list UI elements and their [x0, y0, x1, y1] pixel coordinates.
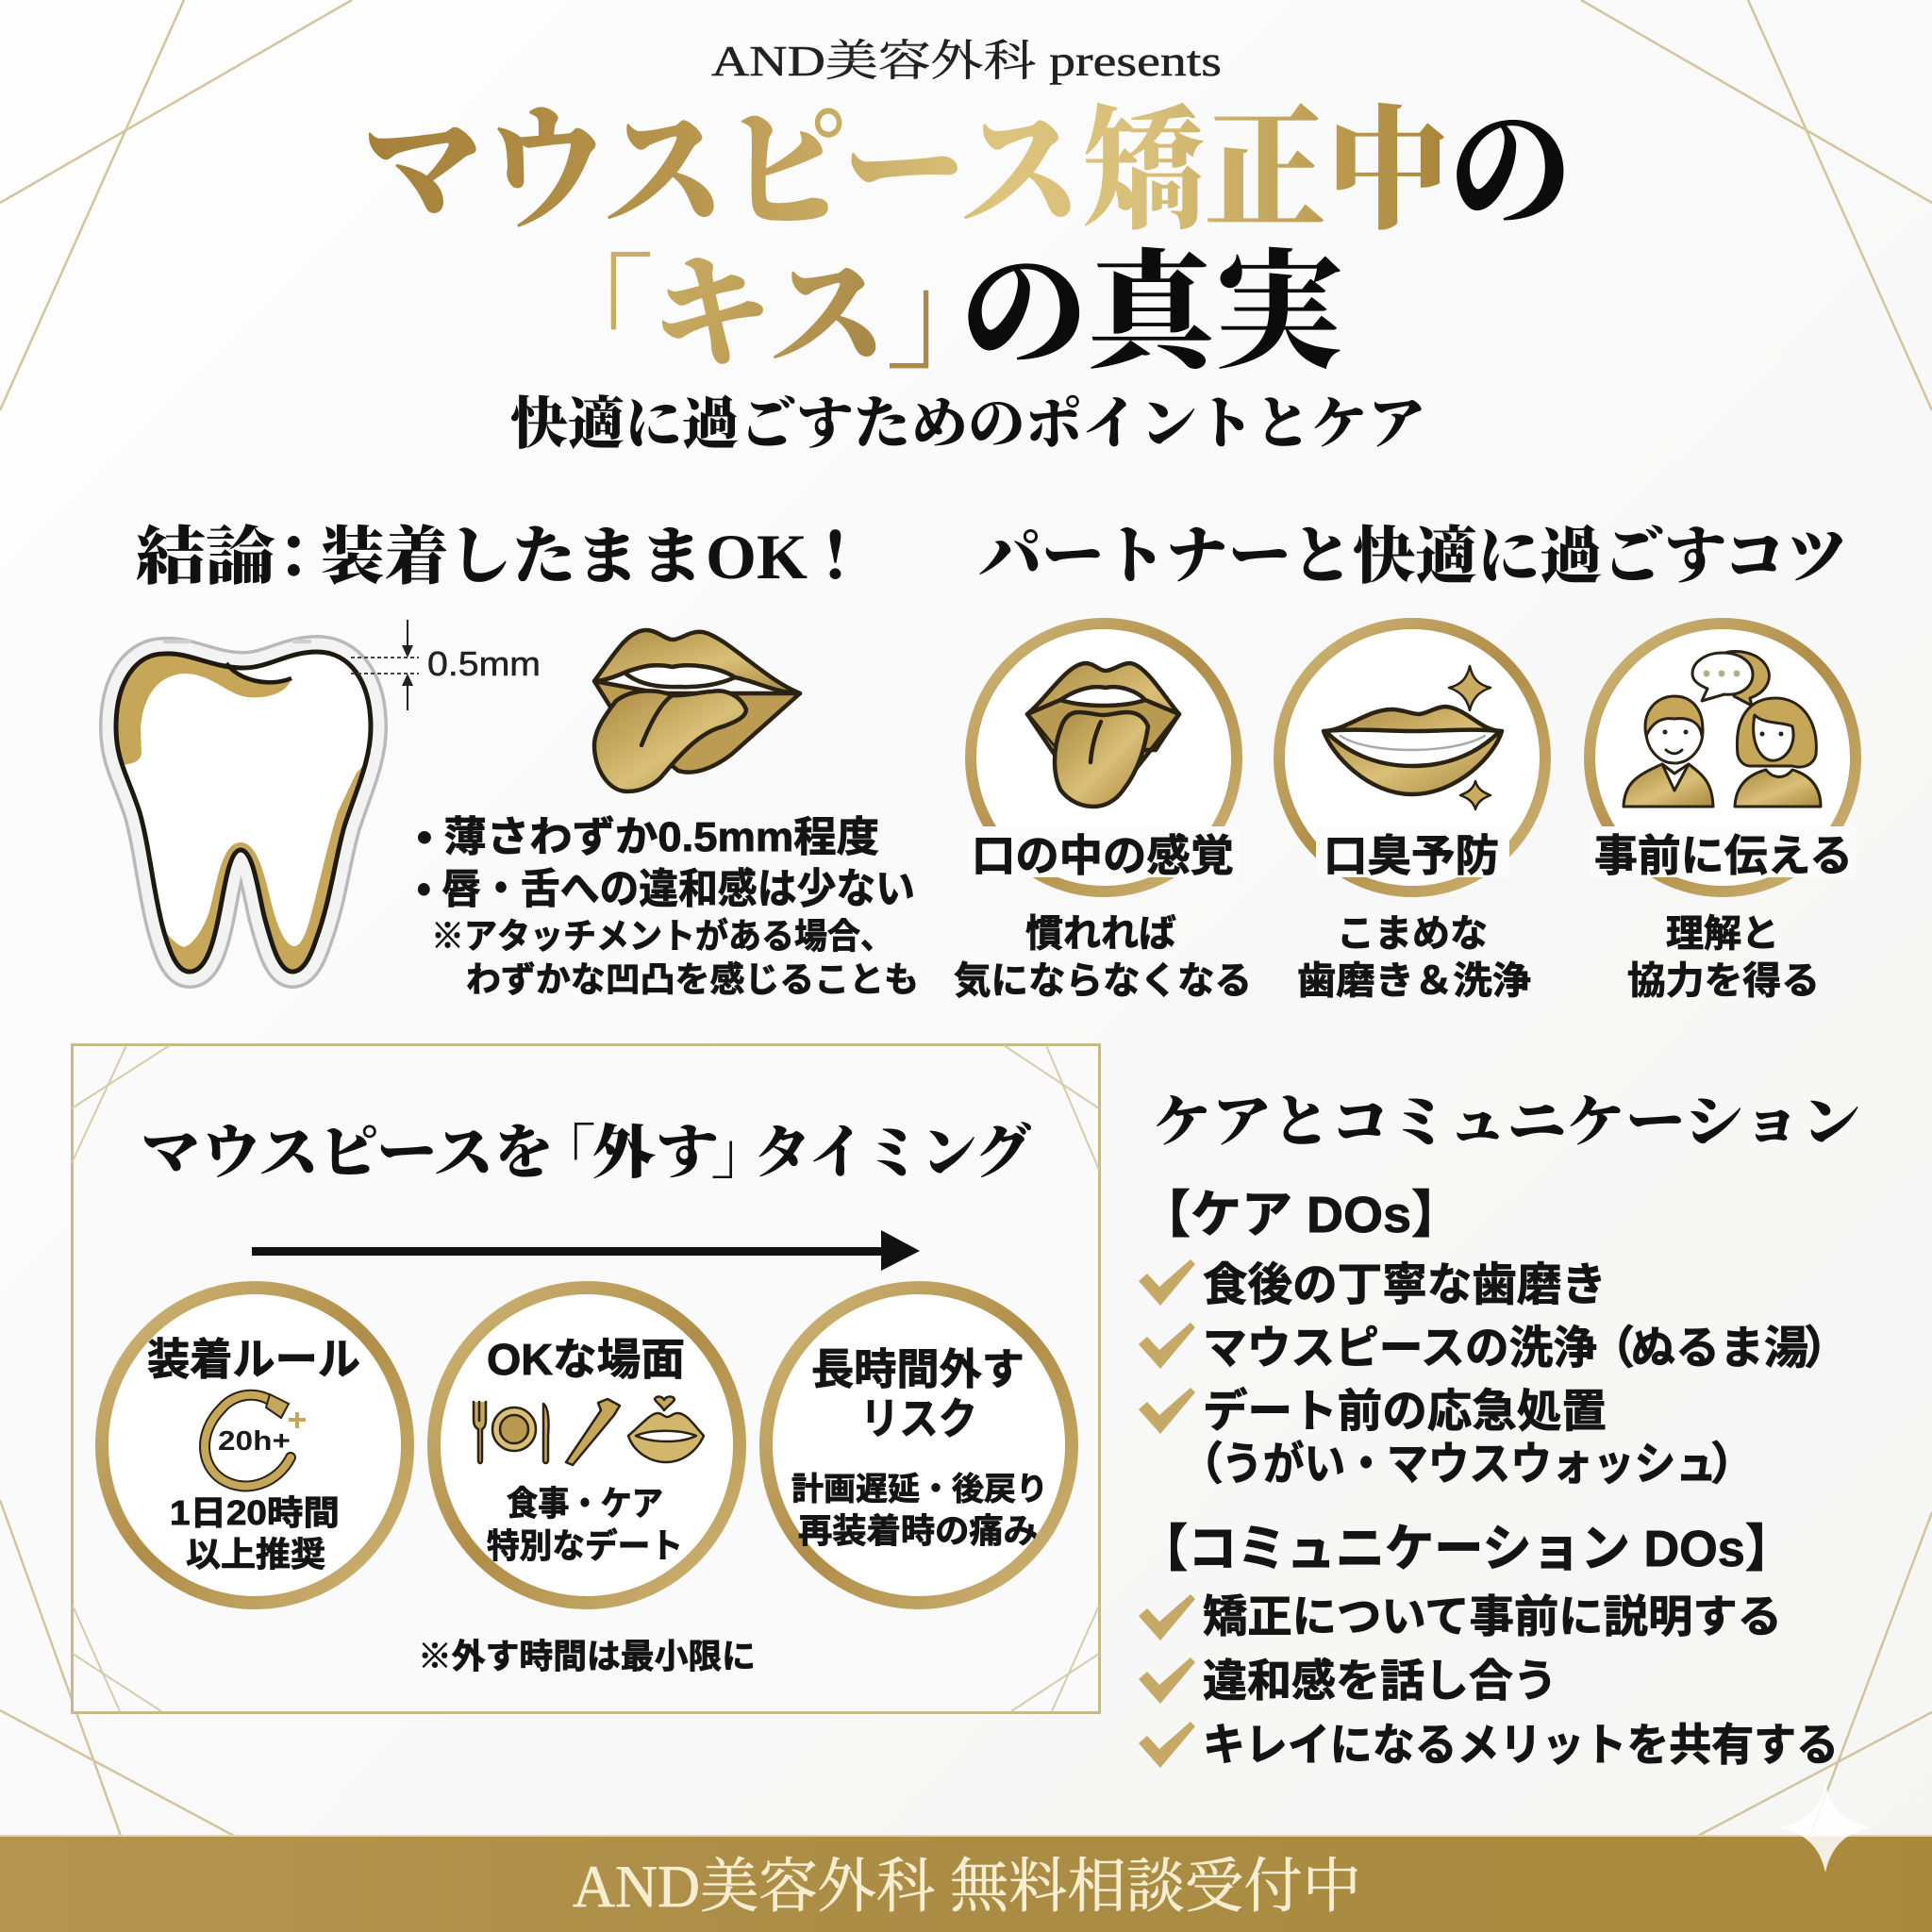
icon: 20h+ cycle — [205, 1394, 306, 1486]
circle: OK situations — [434, 1288, 740, 1603]
label: tell in advance: 事前に伝える — [1594, 831, 1853, 880]
panel: removal timing — [72, 1045, 1100, 1713]
text: thinness notes: わずかな凹凸を感じることも — [466, 960, 919, 999]
icon: mouth and tongue — [1027, 663, 1179, 807]
list items: care — [1178, 1260, 1849, 1490]
arrow — [252, 1230, 920, 1271]
circle: wearing rule — [102, 1288, 408, 1603]
text: breath care detail: 歯磨き＆洗浄 — [1297, 960, 1531, 1002]
header presenter line: AND美容外科 presents — [711, 37, 1222, 85]
heading: removal timing: 「 — [537, 1122, 595, 1186]
icon: lips with tongue — [594, 630, 800, 791]
list items: communication — [1203, 1591, 1839, 1770]
heading: conclusion: 結論 — [136, 523, 275, 592]
heading: partner tips: パートナーと快適に過ごすコツ — [979, 523, 1848, 591]
icon: 20h+ cycle: 20h+ — [218, 1426, 291, 1457]
text: OK situations detail: 特別なデート — [487, 1526, 683, 1565]
callout: thickness 0.5mm — [351, 620, 541, 710]
footer band — [0, 1835, 1932, 1932]
text: thinness notes: • 薄さわずか0.5mm程度 — [417, 814, 879, 860]
footer text: AND美容外科 無料相談受付中 — [573, 1854, 1361, 1920]
list items: care: ） — [1710, 1440, 1756, 1490]
heading: conclusion: OK — [706, 521, 808, 592]
text: thinness notes: • 唇・舌への違和感は少ない — [417, 866, 915, 912]
tip circle: tell in advance — [1590, 624, 1856, 1002]
heading: removal timing: マウスピースを — [141, 1122, 554, 1186]
text: wearing rule detail: 1日20時間 — [170, 1493, 340, 1532]
label: long-removal risks — [811, 1345, 1024, 1443]
text: tell in advance detail: 協力を得る — [1627, 960, 1820, 1002]
title line 2 gold: 「キス」 — [535, 248, 1005, 384]
note: keep removal minimal: ※外す時間は最小限に — [418, 1637, 756, 1675]
icon: cutlery, toothbrush, lips — [474, 1396, 704, 1465]
panel: conclusion — [113, 521, 919, 999]
text: sensation detail — [954, 913, 1252, 1002]
label: long-removal risks: 長時間外す — [811, 1345, 1024, 1393]
heading: conclusion — [136, 521, 867, 592]
list items: communication: 矯正について事前に説明する — [1203, 1591, 1782, 1641]
title line 1: マウスピース矯正中の — [361, 97, 1572, 246]
subheading: care DOs: 【ケア DOs】 — [1140, 1187, 1462, 1243]
label: wearing rule: 装着ルール — [147, 1335, 360, 1384]
list items: care: マウスピースの洗浄 — [1203, 1324, 1597, 1374]
list items: care: ぬるま湯 — [1631, 1324, 1808, 1374]
text: OK situations detail — [487, 1484, 683, 1565]
heading: conclusion: ！ — [804, 523, 867, 592]
text: tell in advance detail — [1627, 913, 1820, 1002]
circle: long-removal risks — [766, 1288, 1072, 1603]
text: sensation detail: 気にならなくなる — [954, 960, 1252, 1002]
check icons: communication — [1139, 1594, 1195, 1768]
heading: care and communication: ケアとコミュニケーション — [1153, 1091, 1860, 1154]
heading: removal timing: タイミング — [755, 1121, 1031, 1186]
heading: conclusion: ： — [262, 523, 325, 592]
icon: sparkle watermark — [1777, 1783, 1872, 1873]
text: risks detail: 再装着時の痛み — [798, 1511, 1038, 1550]
text: OK situations detail: 食事・ケア — [507, 1484, 663, 1523]
text: risks detail: 計画遅延・後戻り — [791, 1472, 1048, 1507]
label: OK situations: OKな場面 — [487, 1335, 685, 1384]
list items: care: うがい・マウスウォッシュ — [1222, 1440, 1717, 1490]
text: wearing rule detail — [170, 1493, 340, 1574]
title — [361, 97, 1572, 385]
tip circle: breath care — [1279, 624, 1545, 1002]
text: wearing rule detail: 以上推奨 — [186, 1535, 325, 1574]
text: thinness notes: ※アタッチメントがある場合、 — [431, 917, 893, 956]
heading: removal timing: 外す — [592, 1122, 719, 1186]
icon: couple talking — [1624, 652, 1821, 807]
list items: care: （ — [1178, 1440, 1224, 1490]
title line 2 black: の真実 — [960, 243, 1342, 385]
tip circle: sensation — [954, 624, 1252, 1002]
heading: conclusion: 装着したまま — [321, 523, 704, 592]
subtitle: 快適に過ごすためのポイントとケア — [510, 393, 1425, 456]
text: sensation detail: 慣れれば — [1025, 913, 1176, 955]
label: breath care: 口臭予防 — [1324, 831, 1499, 880]
list items: care: デート前の応急処置 — [1203, 1387, 1607, 1437]
text: thinness notes — [417, 814, 919, 999]
text: tell in advance detail: 理解と — [1666, 913, 1779, 955]
check icons: care — [1139, 1259, 1195, 1434]
list items: care: ） — [1804, 1324, 1849, 1374]
text: breath care detail — [1297, 913, 1531, 1002]
text: risks detail — [791, 1472, 1048, 1550]
label: sensation: 口の中の感覚 — [972, 831, 1234, 880]
icon: tooth with aligner — [113, 638, 377, 972]
heading: removal timing: 」 — [711, 1122, 770, 1186]
panel: partner tips — [954, 523, 1856, 1002]
panel: care and communication — [1139, 1091, 1860, 1770]
list items: communication: 違和感を話し合う — [1203, 1656, 1557, 1706]
list: communication DOs — [1139, 1521, 1839, 1770]
list: care DOs — [1139, 1187, 1849, 1490]
heading: removal timing — [141, 1121, 1031, 1186]
text: breath care detail: こまめな — [1337, 913, 1488, 955]
label: long-removal risks: リスク — [860, 1394, 977, 1443]
list items: care: 食後の丁寧な歯磨き — [1203, 1260, 1607, 1310]
subheading: communication DOs: 【コミュニケーション DOs】 — [1139, 1521, 1794, 1577]
icon: smile lips with sparkles — [1324, 666, 1502, 809]
callout: thickness 0.5mm: 0.5mm — [427, 644, 541, 683]
list items: communication: キレイになるメリットを共有する — [1203, 1720, 1839, 1770]
list items: care: （ — [1590, 1324, 1635, 1374]
